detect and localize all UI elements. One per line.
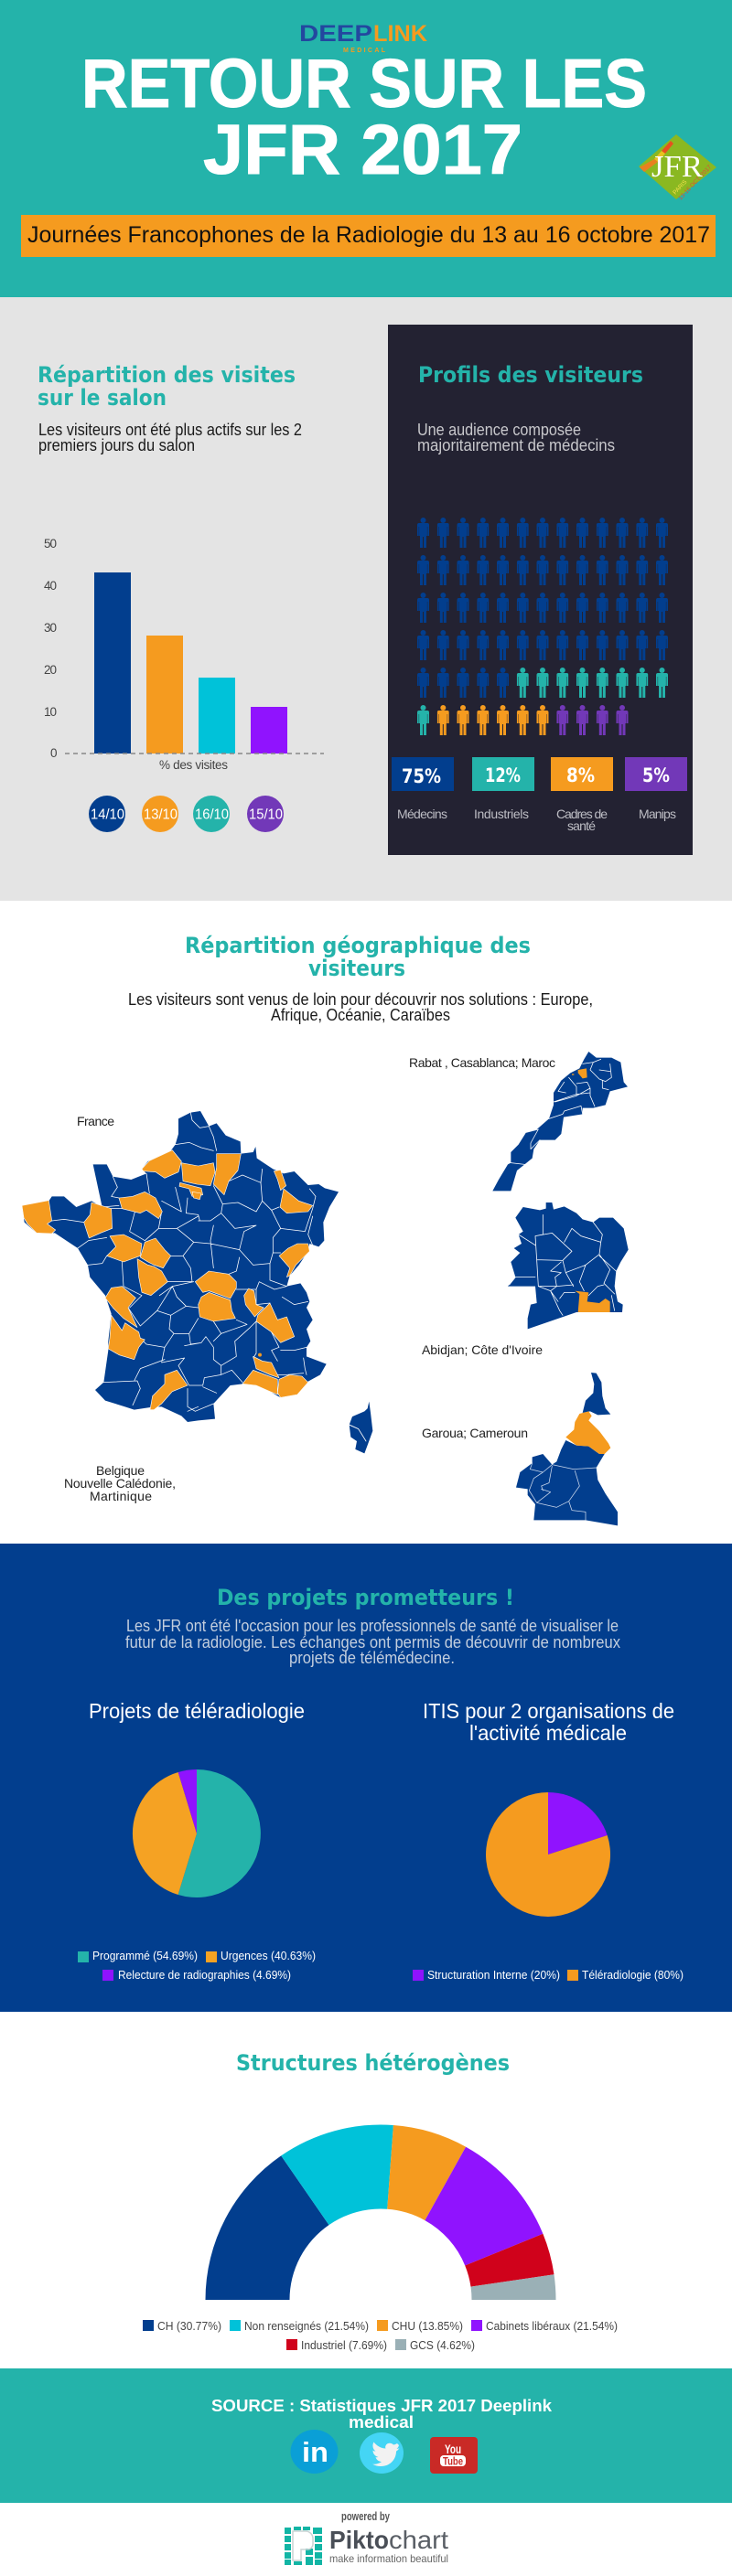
logo mark: Piktochart [285,2527,322,2565]
legend: structures [143,2319,618,2352]
legend: structures: Cabinets libéraux (21.54%) [486,2319,618,2333]
heading: profiles: Profils des visiteurs [418,362,643,388]
text: audience intro: Une audience composée [417,421,581,439]
chart title: ITIS: l'activité médicale [469,1721,627,1745]
legend: day circles: 14/10 [91,807,124,823]
text: audience intro: majoritairement de médecins [417,436,615,454]
logo: JFR diamond: JFR [651,150,703,184]
legend: teleradiology [78,1949,316,1982]
legend: day circles [89,796,284,832]
legend: teleradiology: Urgences (40.63%) [221,1949,316,1962]
text: projects intro: Les JFR ont été l'occasion pour les professionnels de santé de visualiser le [126,1617,619,1635]
text: visits intro: premiers jours du salon [38,436,195,454]
heading: visits [38,362,296,411]
text: projects intro [125,1617,620,1667]
stat: radiographers 5% [625,757,687,821]
legend: day circles: 15/10 [249,807,283,823]
heading: geography: visiteurs [308,956,405,981]
legend: ITIS: Structuration Interne (20%) [427,1968,560,1982]
pie chart: teleradiology [133,1769,261,1897]
pictogram: visitors by profile [417,518,668,735]
legend: teleradiology: Relecture de radiographies (4.69%) [118,1968,291,1982]
text: audience intro [417,421,615,454]
stat: industry 12%: 12% [485,764,521,786]
map: France [22,1111,339,1422]
logo: Deeplink Medical: DEEP [299,21,372,47]
legend: structures: Non renseignés (21.54%) [244,2319,369,2333]
icon: YouTube: Tube [443,2454,463,2467]
heading: visits: sur le salon [38,385,167,411]
label: Cameroon: Garoua; Cameroun [422,1426,528,1440]
semi-donut chart: structures [205,2124,556,2300]
text: geography intro: Afrique, Océanie, Caraïbes [271,1006,450,1024]
panel: geographic distribution [22,933,629,1525]
stat: doctors 75%: 75% [402,765,441,787]
logo: Deeplink Medical [299,21,427,54]
bar chart: visits by day: 40 [44,579,57,593]
wordmark: Piktochart: chart [389,2526,448,2554]
text: source: medical [349,2413,414,2432]
label: other countries: Nouvelle Calédonie, [64,1476,176,1491]
stat: radiographers 5%: 5% [642,764,670,786]
text: projects intro: projets de télémédecine. [289,1649,455,1667]
legend: day circles: 13/10 [144,807,178,823]
bar chart: visits by day: 0 [50,746,58,760]
wordmark: Piktochart: make information beautiful [329,2552,448,2565]
icon: Twitter [360,2432,404,2474]
icon: YouTube [430,2437,478,2474]
heading: projects: Des projets prometteurs ! [217,1585,514,1610]
icon: LinkedIn: in [302,2436,328,2468]
banner: dates [21,215,716,257]
text: visits intro [38,421,302,454]
panel: grey section [0,297,732,901]
label: other countries: Belgique [96,1463,145,1478]
bar chart: visits by day [44,537,324,772]
icon: LinkedIn [291,2430,339,2474]
label: other countries [64,1463,176,1503]
label: Morocco: Rabat , Casablanca; Maroc [409,1055,555,1070]
map: Ivory Coast [508,1202,629,1329]
pie chart: ITIS [486,1792,610,1917]
chart title: ITIS: ITIS pour 2 organisations de [423,1699,674,1723]
chart title: ITIS [423,1699,674,1745]
panel: visitor profiles [388,325,693,855]
stat: managers 8%: santé [567,818,596,833]
bar chart: visits by day: % des visites [159,758,228,772]
label: France: France [77,1114,114,1128]
legend: ITIS: Téléradiologie (80%) [582,1968,684,1982]
legend: teleradiology: Programmé (54.69%) [92,1949,198,1962]
wordmark: Piktochart: Pikto [329,2526,389,2554]
heading: structures: Structures hétérogènes [236,2050,510,2076]
text: source: SOURCE : Statistiques JFR 2017 Deeplink [211,2397,553,2415]
logo: Deeplink Medical: MEDICAL [343,48,386,54]
legend: structures: GCS (4.62%) [410,2338,475,2352]
footer: Piktochart branding [285,2509,448,2565]
label: other countries: Martinique [90,1489,152,1503]
panel: header [0,0,732,297]
heading: visits: Répartition des visites [38,362,296,388]
text: geography intro: Les visiteurs sont venus de loin pour découvrir nos solutions : Europe, [128,990,593,1009]
map: Cameroon [516,1373,618,1525]
stat: doctors 75% [392,757,454,821]
map: Corsica [350,1402,372,1453]
panel: source footer [0,2368,732,2503]
logo: JFR diamond: 13-16 OCT. 2017 [677,164,713,201]
bar chart: visits by day: 10 [44,705,57,719]
legend: structures: Industriel (7.69%) [301,2338,387,2352]
map: Morocco [492,1052,628,1191]
legend: structures: CHU (13.85%) [392,2319,463,2333]
title [81,45,647,189]
legend: day circles: 16/10 [195,807,229,823]
logo: Deeplink Medical: LINK [373,21,427,47]
icon: YouTube: You [445,2442,461,2456]
stat: managers 8%: 8% [566,764,595,786]
stat: radiographers 5%: Manips [639,807,676,821]
banner: dates: Journées Francophones de la Radiologie du 13 au 16 octobre 2017 [27,222,710,248]
text: projects intro: futur de la radiologie. Les échanges ont permis de découvrir de nombreux [125,1633,620,1651]
text: geography intro [128,990,593,1024]
logo: JFR diamond [639,134,716,201]
text: powered by: powered by [341,2509,391,2523]
text: source [211,2397,553,2432]
logo: JFR diamond: PARIS [672,178,689,196]
title: JFR 2017 [203,111,522,189]
wordmark: Piktochart [329,2526,448,2565]
legend: ITIS [413,1968,684,1982]
stat: managers 8%: Cadres de [556,807,608,821]
label: Ivory Coast: Abidjan; Côte d'Ivoire [422,1342,543,1357]
text: visits intro: Les visiteurs ont été plus actifs sur les 2 [38,421,302,439]
heading: geography [185,933,531,981]
legend: structures: CH (30.77%) [157,2319,221,2333]
heading: geography: Répartition géographique des [185,933,531,958]
panel: promising projects [0,1544,732,2012]
bar chart: visits by day: 50 [44,537,57,550]
bar chart: visits by day: 20 [44,663,57,677]
stat: industry 12%: Industriels [474,807,529,821]
stat: managers 8% [551,757,613,833]
title: RETOUR SUR LES [81,45,647,122]
stat: doctors 75%: Médecins [397,807,447,821]
bar chart: visits by day: 30 [44,621,57,635]
chart title: teleradiology: Projets de téléradiologie [89,1699,305,1723]
panel: structures [143,2050,618,2352]
stat: industry 12% [472,757,534,821]
